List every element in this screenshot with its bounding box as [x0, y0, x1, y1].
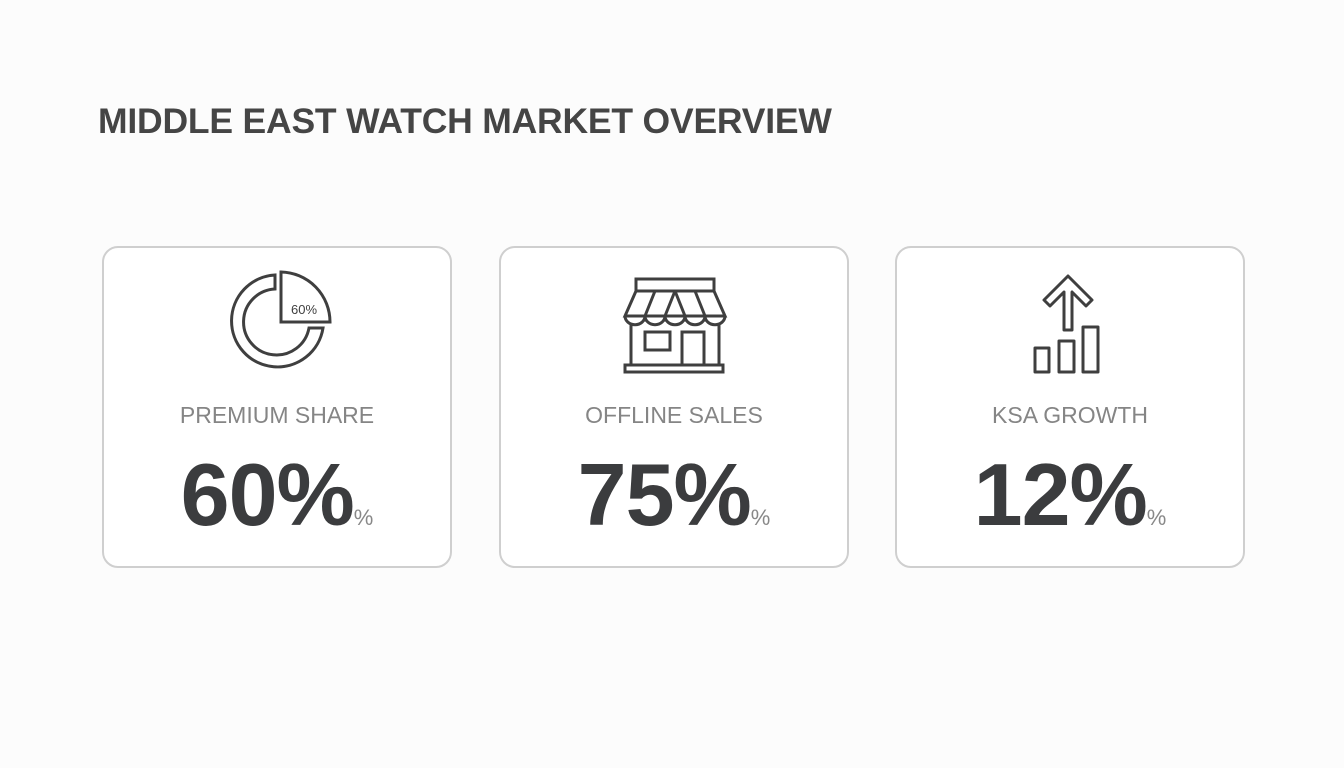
icon: pie chart: 60% [291, 302, 317, 317]
value: 12%% [974, 445, 1166, 544]
icon: store [622, 278, 728, 374]
panel: offline sales [499, 246, 849, 568]
value: 60%% [181, 445, 373, 544]
label: PREMIUM SHARE [180, 402, 374, 428]
label: KSA GROWTH [992, 402, 1148, 428]
title: MIDDLE EAST WATCH MARKET OVERVIEW [98, 101, 832, 141]
label: OFFLINE SALES [585, 402, 763, 428]
panel: ksa growth [895, 246, 1245, 568]
icon: growth bars [1034, 274, 1100, 374]
panel: premium share [102, 246, 452, 568]
value: 75%% [578, 445, 770, 544]
icon: pie chart [230, 270, 332, 368]
